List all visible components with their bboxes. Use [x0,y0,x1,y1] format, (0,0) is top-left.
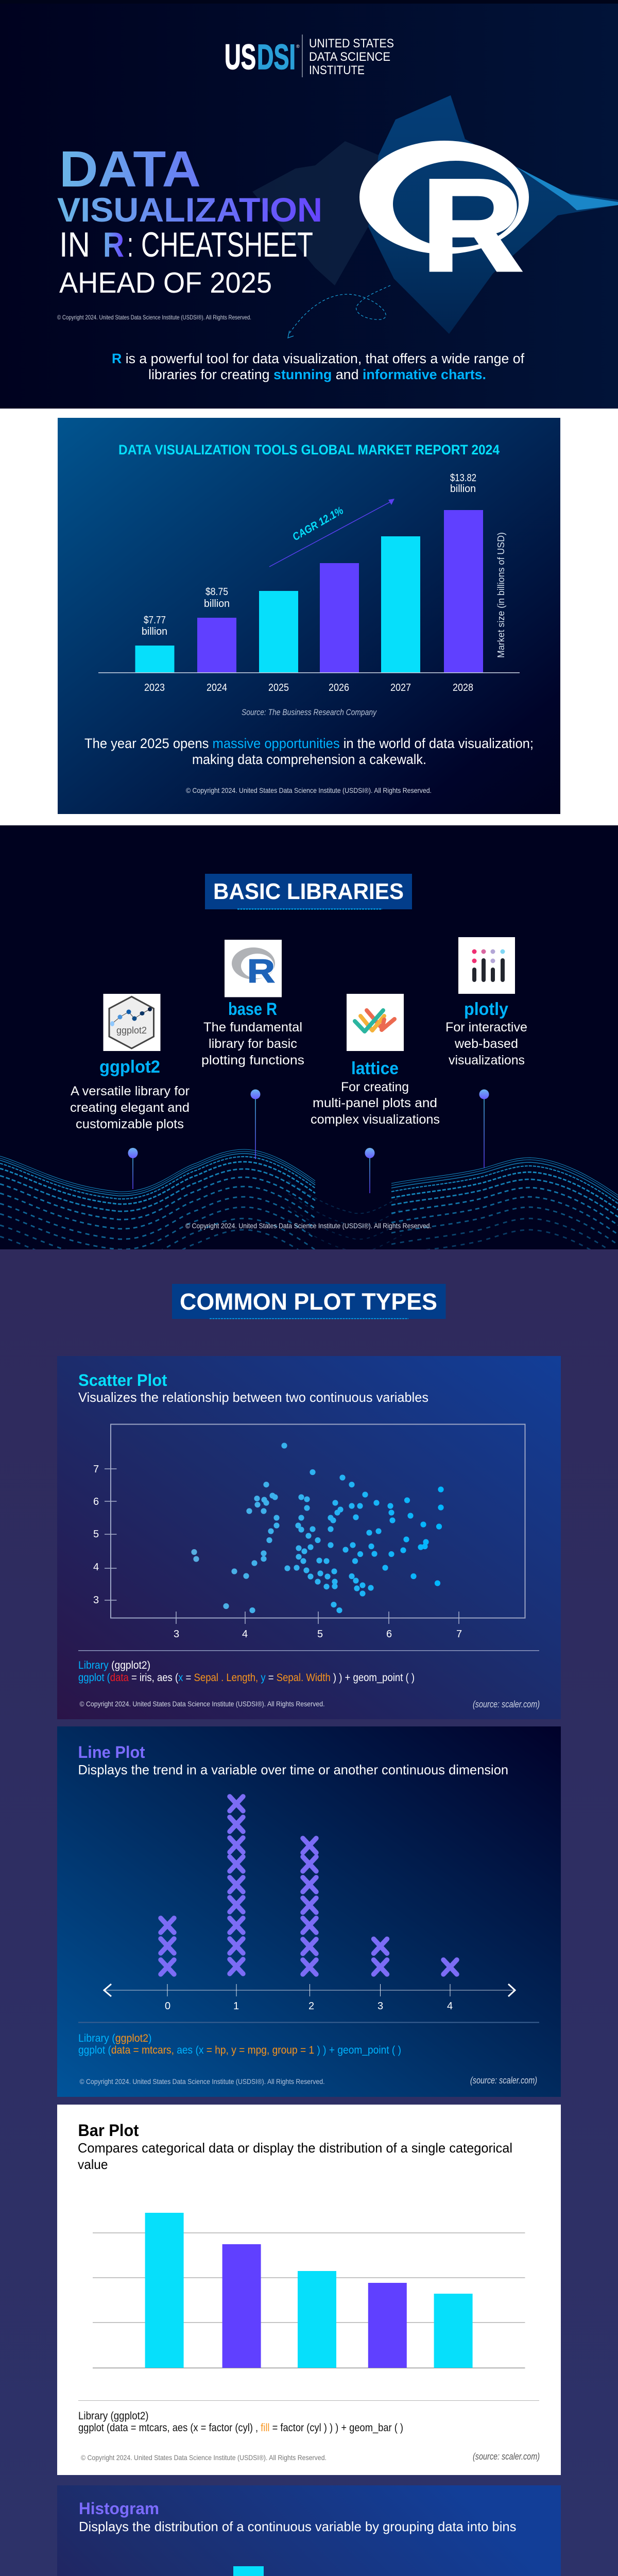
number line [104,1984,516,2012]
bar chart: billion [142,626,167,637]
library: lattice: complex visualizations [311,1112,440,1127]
hero section [0,0,618,409]
title: : [127,225,133,264]
library: plotly: web-based [454,1037,518,1051]
scatter chart: 3 [174,1629,179,1640]
icon: ggplot2 hexagon: ggplot2 [116,1025,147,1036]
heading: basic libraries [205,874,412,909]
scatter chart: 4 [93,1562,99,1573]
library: base R: library for basic [209,1037,297,1051]
library: ggplot2: customizable plots [76,1117,184,1131]
market summary: The year 2025 opens massive opportunities in the world of data visualization; [84,736,534,751]
bar chart: 2027 [390,682,411,693]
code: line plot: Library (ggplot2) [78,2032,151,2044]
title: AHEAD OF 2025 [59,266,272,299]
scatter chart: 6 [386,1629,392,1640]
R logo [359,141,529,299]
panel: bar plot: Compares categorical data or display the distribution of a single categorical [78,2140,512,2156]
panel: bar plot: Bar Plot [78,2121,139,2140]
library: base R [201,940,304,1067]
library: base R: The fundamental [203,1020,302,1035]
heading: common plot types: COMMON PLOT TYPES [180,1289,437,1315]
panel: histogram [57,2485,561,2576]
code: bar plot [78,2410,403,2434]
panel: line plot: Line Plot [78,1743,145,1761]
bar chart: $7.77 [144,615,166,626]
title: R [103,225,124,264]
code: scatter plot: Library (ggplot2) [78,1659,150,1671]
bar chart: $13.82 [450,472,476,484]
code: bar plot: ggplot (data = mtcars, aes (x = factor (cyl) , fill = factor (cyl ) ) ) + geom_bar ( ) [78,2422,403,2434]
scatter chart: 6 [93,1496,99,1507]
USDSI logo: DSI [257,37,296,77]
USDSI logo: INSTITUTE [309,63,365,77]
panel: bar plot: © Copyright 2024. United States Data Science Institute (USDSI®). All Rights Reserved. [81,2453,327,2462]
code: bar plot: Library (ggplot2) [78,2410,148,2422]
scatter chart [93,1424,525,1640]
library: base R: base R [228,999,277,1019]
number line: 4 [447,2001,453,2012]
library: ggplot2: ggplot2 [99,1057,160,1077]
bar chart: Market size (in billions of USD) [496,532,506,658]
panel: bar plot: value [78,2157,108,2172]
chart heading: DATA VISUALIZATION TOOLS GLOBAL MARKET REPORT 2024 [118,442,500,457]
panel: line plot: © Copyright 2024. United States Data Science Institute (USDSI®). All Rights Reserved. [79,2077,324,2086]
pins [128,1089,489,1193]
icon: plotly mark [472,949,505,980]
panel: line plot: Displays the trend in a variable over time or another continuous dimension [78,1762,508,1777]
bar chart: 2023 [144,682,165,693]
bar chart: 2025 [268,682,289,693]
scatter chart: 7 [93,1464,99,1475]
bar chart [98,472,520,693]
USDSI logo: DATA SCIENCE [309,50,390,64]
library: lattice [311,994,440,1127]
bar chart: 2028 [453,682,473,693]
panel: scatter plot: © Copyright 2024. United States Data Science Institute (USDSI®). All Rights Reserved. [79,1700,324,1708]
panel: market report card [58,418,560,814]
copyright: © Copyright 2024. United States Data Science Institute (USDSI®). All Rights Reserved. [186,786,432,794]
source note: Source: The Business Research Company [242,707,377,717]
code: line plot: ggplot (data = mtcars, aes (x = hp, y = mpg, group = 1 ) ) + geom_point ( ) [78,2044,401,2056]
icon: ggplot2 hexagon [109,996,153,1048]
intro text: R is a powerful tool for data visualization, that offers a wide range of [112,351,524,366]
bar chart: $8.75 [205,586,228,598]
icon: R logo [232,947,275,990]
panel: scatter plot: Visualizes the relationship between two continuous variables [78,1389,428,1405]
scatter chart: 5 [317,1629,323,1640]
intro text: libraries for creating stunning and informative charts. [148,367,486,382]
copyright: © Copyright 2024. United States Data Science Institute (USDSI®). All Rights Reserved. [185,1222,432,1230]
library: base R: plotting functions [201,1053,304,1067]
CAGR arrow: CAGR 12.1% [290,504,346,543]
library: lattice: For creating [341,1080,409,1094]
scatter chart: 7 [456,1629,462,1640]
scatter chart: 3 [93,1595,99,1606]
histogram bars [112,2566,507,2576]
market summary [84,736,534,767]
title: VISUALIZATION [57,191,322,229]
bar chart: 2026 [329,682,349,693]
USDSI logo: ® [296,44,300,49]
panel: bar plot: (source: scaler.com) [473,2451,540,2462]
hero copyright: © Copyright 2024. United States Data Science Institute (USDSI®). All Rights Reserved. [57,314,251,321]
library: ggplot2: A versatile library for [71,1084,190,1098]
title: DATA [59,141,201,197]
number line: 2 [308,2001,314,2012]
heading: basic libraries: BASIC LIBRARIES [213,879,404,904]
market report section [0,409,618,825]
panel: scatter plot [57,1356,561,1719]
number line: 0 [165,2001,170,2012]
basic libraries section [0,825,618,1272]
panel: histogram: Displays the distribution of a continuous variable by grouping data into bins [79,2519,516,2534]
library: plotly: For interactive [445,1020,527,1035]
R logo: R [421,152,523,299]
CAGR arrow [269,499,394,567]
dashed arrow [288,285,390,338]
icon: lattice chevrons [355,1010,394,1031]
icon: R logo: R [247,953,275,990]
scatter chart: 4 [242,1629,248,1640]
USDSI logo [225,35,394,77]
code: line plot [78,2032,401,2056]
number line: 3 [377,2001,383,2012]
USDSI logo: US [225,37,256,77]
library: plotly [445,937,527,1067]
panel: scatter plot: Scatter Plot [78,1371,167,1389]
panel: bar plot [57,2105,561,2475]
library: plotly: visualizations [449,1053,525,1067]
USDSI logo: UNITED STATES [309,37,394,50]
library: ggplot2 [70,994,190,1131]
code: scatter plot: ggplot (data = iris, aes (x = Sepal . Length, y = Sepal. Width ) ) + geom_point ( ) [78,1672,415,1684]
dot plot of crosses [161,1797,457,1974]
library: plotly: plotly [464,999,508,1019]
title [57,141,322,299]
library: ggplot2: creating elegant and [70,1100,190,1115]
bar chart: billion [204,598,230,609]
library: lattice: lattice [351,1059,399,1078]
market summary: making data comprehension a cakewalk. [192,752,426,767]
panel: histogram: Histogram [79,2499,159,2518]
library: lattice: multi-panel plots and [313,1096,437,1110]
panel: scatter plot: (source: scaler.com) [473,1699,540,1709]
bar chart: 2024 [207,682,227,693]
wave background [0,1149,618,1272]
scatter chart: 5 [93,1529,99,1540]
title: CHEATSHEET [141,225,313,264]
intro text [112,351,524,382]
common plot types section [0,1249,618,2576]
panel: line plot: (source: scaler.com) [470,2075,537,2086]
number line: 1 [233,2001,239,2012]
bar chart [93,2213,525,2368]
code: scatter plot [78,1659,415,1684]
background mountain shape [252,95,618,334]
bar chart: billion [450,483,476,495]
title: IN [59,225,90,264]
panel: line plot [57,1726,561,2097]
